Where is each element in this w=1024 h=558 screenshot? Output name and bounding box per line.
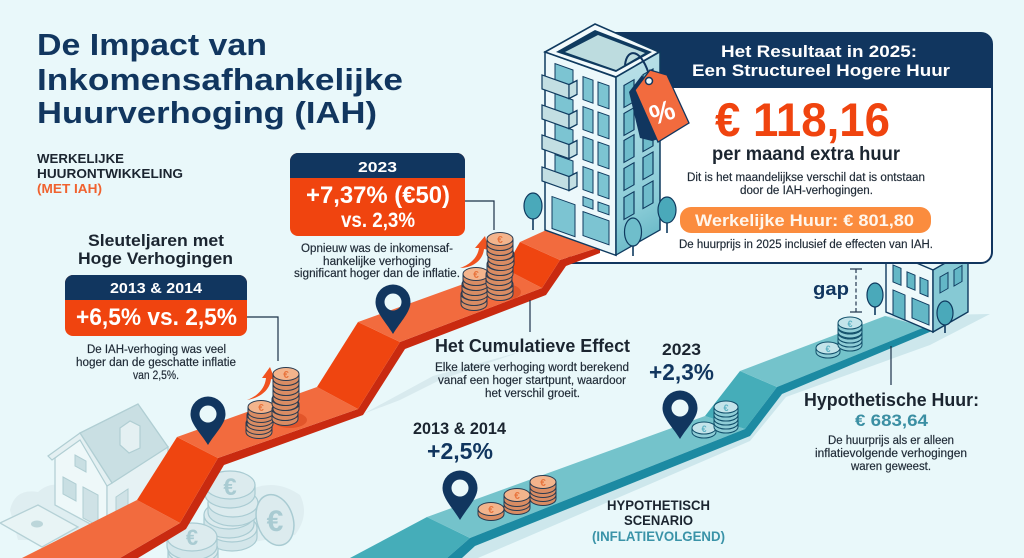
hypothetical rent text: inflatievolgende verhogingen bbox=[815, 448, 967, 460]
result panel bbox=[566, 33, 992, 263]
heading: key years bbox=[78, 231, 233, 268]
tree near gap bbox=[867, 283, 883, 315]
title: De Impact van bbox=[37, 27, 267, 62]
legend: hypothetical scenario bbox=[592, 498, 725, 544]
coins and arrow: 2013 step bbox=[246, 367, 307, 438]
text: 2023 explanation bbox=[294, 243, 460, 280]
legend: actual rent development: WERKELIJKE bbox=[37, 152, 124, 166]
title: Huurverhoging (IAH) bbox=[37, 95, 377, 130]
hypothetical rent text bbox=[804, 390, 979, 473]
cumulative effect text: het verschil groeit. bbox=[485, 388, 580, 400]
legend: hypothetical scenario: (INFLATIEVOLGEND) bbox=[592, 529, 725, 544]
pale euro coin stacks: € bbox=[223, 474, 237, 501]
hypothetical rent text: De huurprijs als er alleen bbox=[828, 435, 954, 447]
coins: teal end of path bbox=[816, 317, 862, 358]
pale euro coin stacks: € bbox=[186, 525, 198, 550]
small hypothetical building bbox=[886, 250, 968, 332]
pill note: De huurprijs in 2025 inclusief de effecten van IAH. bbox=[679, 239, 933, 251]
callout: 2013 and 2014: 2013 & 2014 bbox=[110, 280, 203, 297]
panel header: Een Structureel Hogere Huur bbox=[692, 61, 950, 80]
callout: 2023 bbox=[290, 153, 465, 236]
connector: hypothetical rent bbox=[890, 346, 892, 385]
gap marker bbox=[813, 269, 862, 312]
gap marker: gap bbox=[813, 279, 849, 299]
legend: actual rent development: (MET IAH) bbox=[37, 182, 102, 196]
pale euro coin stacks bbox=[167, 471, 304, 558]
heading: key years: Hoge Verhogingen bbox=[78, 249, 233, 268]
pin: 2013 red path bbox=[190, 396, 226, 445]
coins: teal 2013 step bbox=[478, 476, 556, 520]
cumulative effect text bbox=[435, 336, 630, 400]
connector: 2023 callout to coins bbox=[465, 201, 494, 230]
coins and arrow: 2023 step: € bbox=[497, 235, 503, 246]
legend: hypothetical scenario: HYPOTHETISCH bbox=[607, 498, 710, 513]
tree in front of small building bbox=[937, 301, 953, 333]
panel header bbox=[600, 33, 992, 88]
roof bbox=[545, 24, 659, 77]
cumulative effect text: Elke latere verhoging wordt berekend bbox=[435, 362, 629, 374]
callout: 2023: vs. 2,3% bbox=[341, 209, 415, 232]
price tag with percent: % bbox=[645, 94, 679, 131]
panel header: Het Resultaat in 2025: bbox=[721, 42, 917, 61]
coins: teal 2023 step: € bbox=[701, 424, 707, 434]
pin: teal 2023 bbox=[662, 390, 698, 439]
coins: teal end of path: € bbox=[825, 344, 831, 354]
coins: teal 2023 step bbox=[692, 401, 738, 438]
coins and arrow: 2023 step: € bbox=[473, 270, 479, 281]
big amount: € 118,16 bbox=[715, 93, 890, 146]
pale house illustration bbox=[0, 404, 168, 547]
legend: hypothetical scenario: SCENARIO bbox=[624, 513, 693, 528]
connector: 2013 callout to coins bbox=[247, 317, 278, 361]
heading: key years: Sleuteljaren met bbox=[88, 231, 224, 250]
label: teal 2023: +2,3% bbox=[649, 359, 714, 385]
coins and arrow: 2013 step: € bbox=[258, 403, 264, 414]
callout: 2023: +7,37% (€50) bbox=[306, 182, 450, 209]
coins: teal 2013 step: € bbox=[488, 505, 494, 516]
price tag with percent bbox=[625, 53, 689, 142]
red ribbon: actual rent path bbox=[22, 227, 600, 558]
title bbox=[37, 27, 403, 130]
actual rent pill: Werkelijke Huur: € 801,80 bbox=[695, 211, 914, 230]
callout: 2013 and 2014 bbox=[65, 275, 247, 336]
hypothetical rent text: waren geweest. bbox=[850, 461, 931, 473]
label: teal 2013 and 2014: +2,5% bbox=[427, 438, 493, 464]
text: 2023 explanation: hankelijke verhoging bbox=[323, 256, 431, 268]
text: 2023 explanation: significant hoger dan de inflatie. bbox=[294, 268, 460, 280]
right wall bbox=[616, 52, 660, 255]
coins: teal 2013 step: € bbox=[514, 491, 520, 502]
coins and arrow: 2013 step: € bbox=[283, 370, 289, 381]
explanation bbox=[687, 172, 925, 197]
cumulative effect text: vanaf een hoger startpunt, waardoor bbox=[438, 375, 626, 387]
hypothetical rent text: € 683,64 bbox=[855, 411, 929, 430]
pale euro coin stacks: € bbox=[267, 505, 284, 538]
coins and arrow: 2023 step bbox=[460, 232, 521, 310]
callout: 2023: 2023 bbox=[358, 159, 397, 176]
cumulative effect text: Het Cumulatieve Effect bbox=[435, 336, 630, 356]
coins: teal end of path: € bbox=[847, 319, 853, 329]
label: teal 2023: 2023 bbox=[662, 340, 701, 359]
pin: teal 2013 bbox=[442, 470, 478, 520]
label: teal 2023 bbox=[649, 340, 714, 385]
hypothetical rent text: Hypothetische Huur: bbox=[804, 390, 979, 410]
explanation: door de IAH-verhogingen. bbox=[740, 185, 873, 197]
title: Inkomensafhankelijke bbox=[37, 62, 403, 97]
label: teal 2013 and 2014: 2013 & 2014 bbox=[413, 420, 507, 438]
actual rent pill bbox=[680, 207, 931, 233]
label: teal 2013 and 2014 bbox=[413, 420, 507, 464]
trees in front of main building bbox=[624, 197, 676, 256]
connector: cumulative effect bbox=[529, 300, 531, 332]
text: 2023 explanation: Opnieuw was de inkomensaf- bbox=[301, 243, 453, 255]
text: 2013 and 2014 explanation: hoger dan de geschatte inflatie bbox=[76, 357, 236, 369]
left wall bbox=[542, 51, 616, 255]
main apartment building bbox=[542, 24, 660, 255]
legend: actual rent development bbox=[37, 152, 183, 196]
text: 2013 and 2014 explanation: De IAH-verhoging was veel bbox=[87, 344, 226, 356]
shadow under red ribbon bbox=[363, 352, 520, 414]
coins: teal 2023 step: € bbox=[723, 403, 729, 413]
legend: actual rent development: HUURONTWIKKELING bbox=[37, 167, 183, 181]
tree behind main building bbox=[524, 193, 542, 230]
teal ribbon: hypothetical scenario path bbox=[350, 314, 990, 558]
per month label: per maand extra huur bbox=[712, 144, 901, 165]
explanation: Dit is het maandelijkse verschil dat is ontstaan bbox=[687, 172, 925, 184]
pin: 2023 red path bbox=[376, 284, 410, 334]
coins: teal 2013 step: € bbox=[540, 478, 546, 489]
callout: 2013 and 2014: +6,5% vs. 2,5% bbox=[76, 304, 237, 331]
text: 2013 and 2014 explanation: van 2,5%. bbox=[133, 370, 179, 382]
text: 2013 and 2014 explanation bbox=[76, 344, 236, 382]
